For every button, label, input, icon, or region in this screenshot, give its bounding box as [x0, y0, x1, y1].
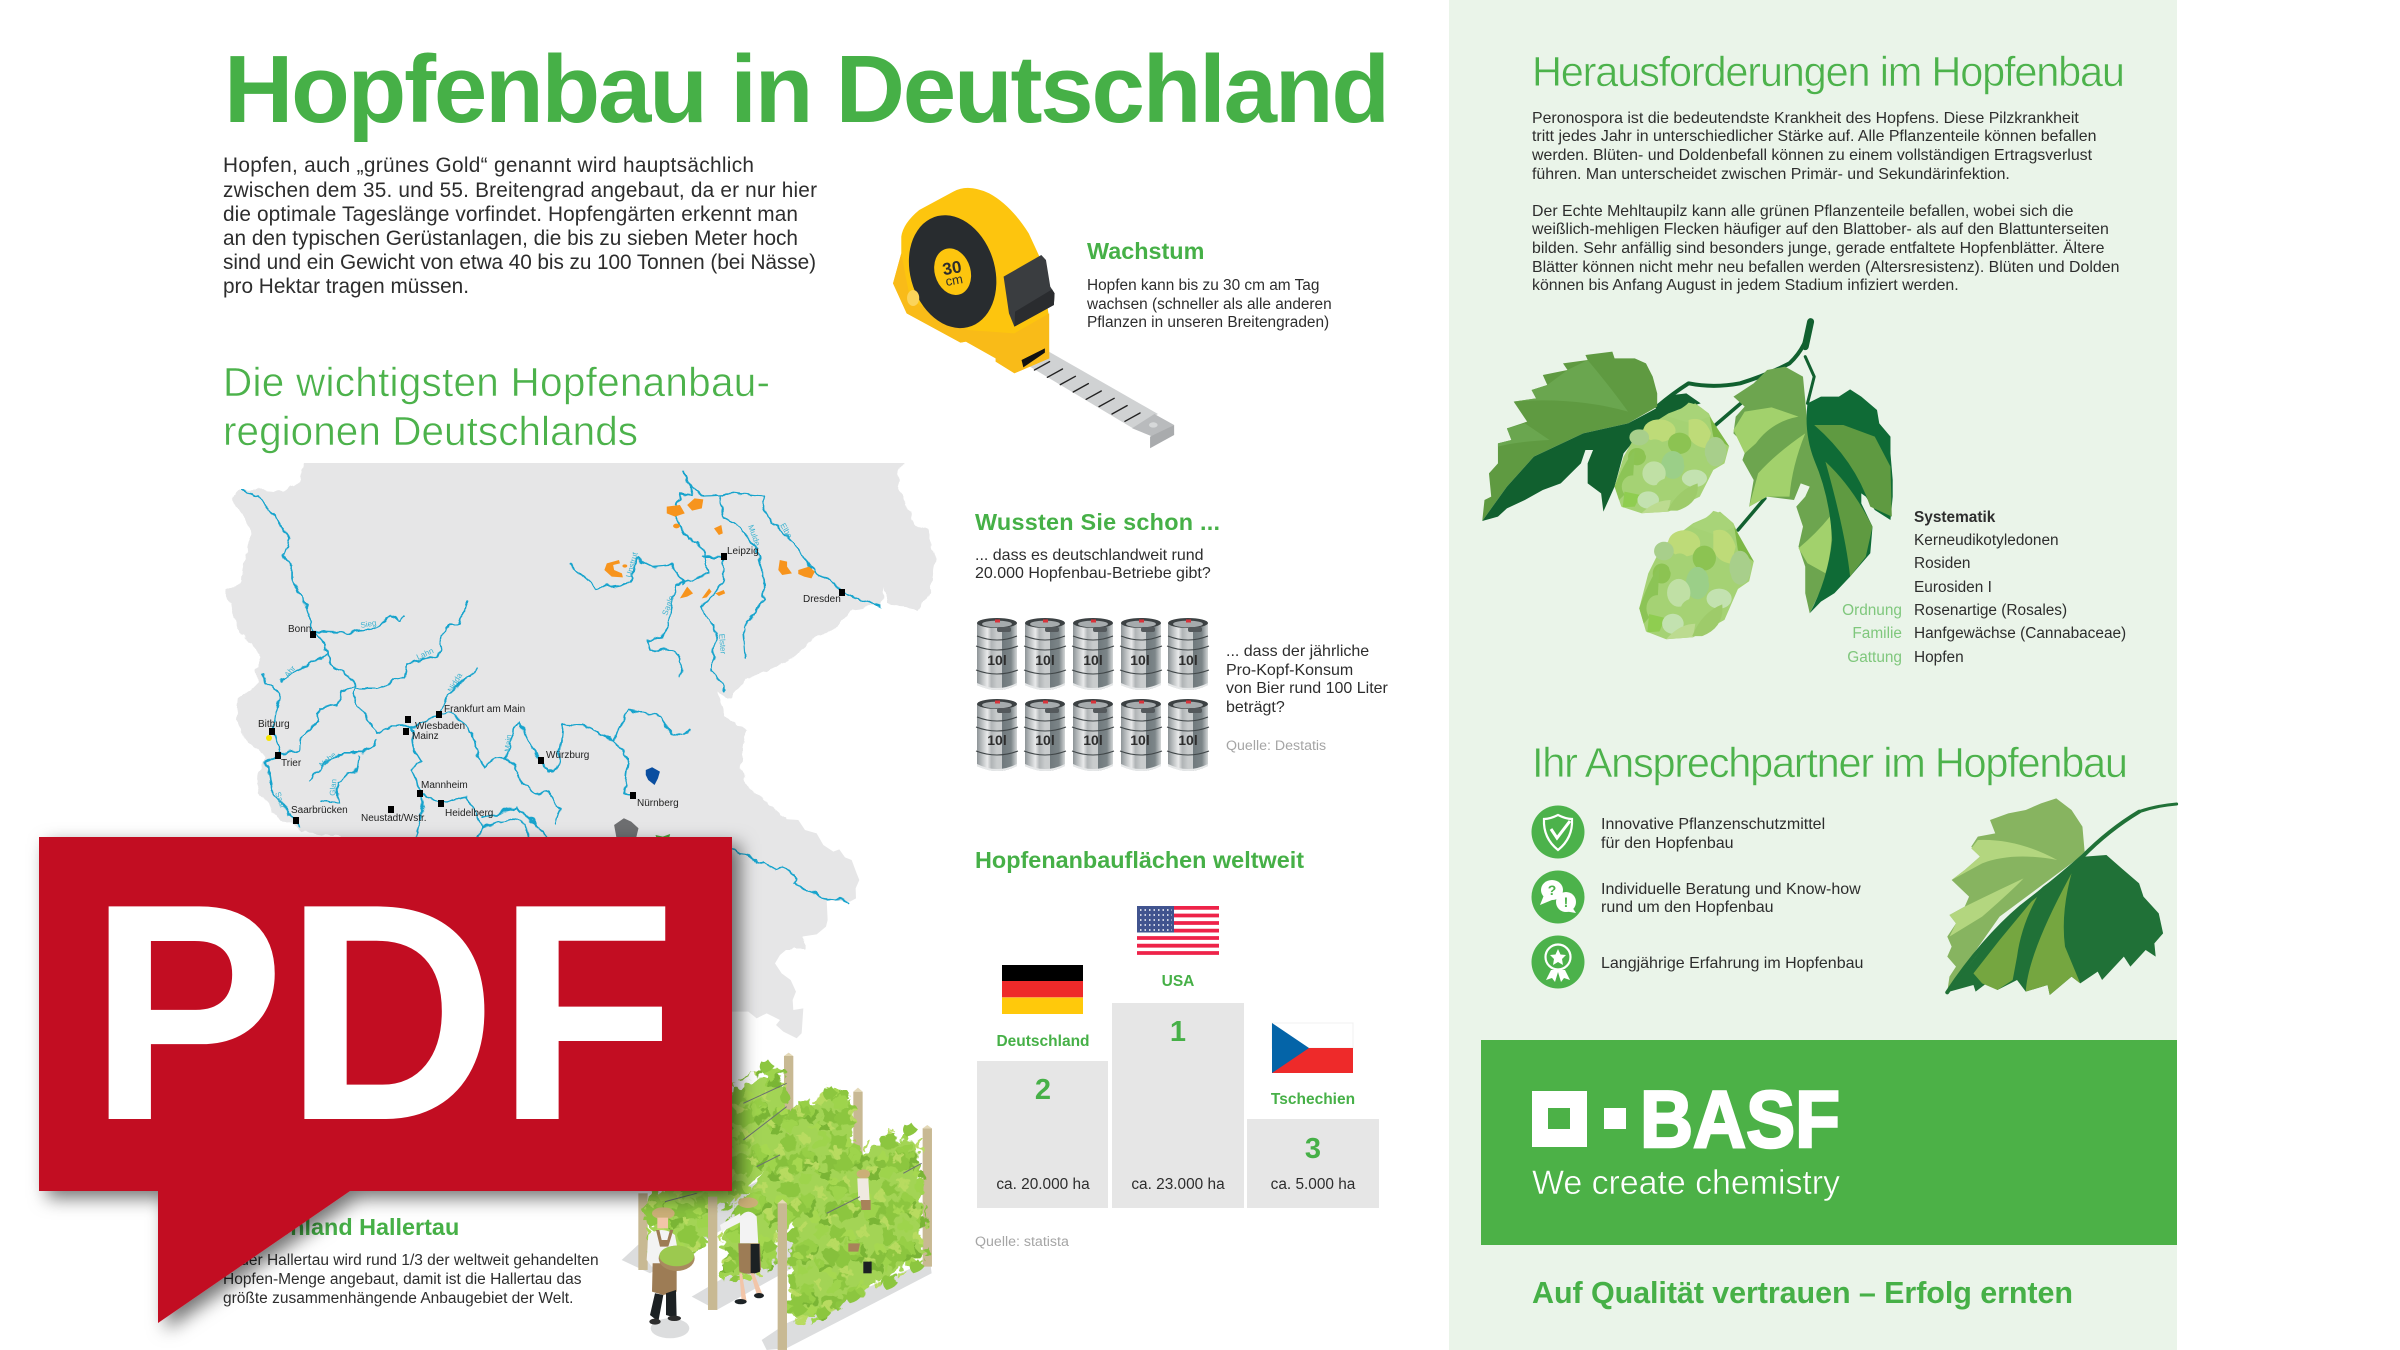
icon grid: beer kegs: 10l [987, 732, 1007, 748]
icon grid: beer kegs: 10l [1035, 732, 1055, 748]
worker middle [720, 1197, 764, 1304]
heading: Herausforderungen: Herausforderungen im Hopfenbau [1532, 48, 2125, 95]
table: Systematik: Hanfgewächse (Cannabaceae) [1914, 625, 2126, 642]
callout: PDF badge [39, 837, 732, 1323]
text block: Peronospora and Mehltau: tritt jedes Jahr in unterschiedlicher Stärke auf. Alle Pflanzenteile können befallen [1532, 128, 2096, 145]
podium bar USA [1112, 1003, 1244, 1208]
podium bar Deutschland [977, 1061, 1108, 1208]
table: Systematik: Eurosiden I [1914, 579, 1992, 596]
table: Systematik: Hopfen [1914, 649, 1964, 666]
text block: Peronospora and Mehltau [1531, 110, 2119, 294]
panel: right light green background [1449, 0, 2177, 1350]
illustration: hop leaf [1947, 798, 2177, 995]
flag: USA [1137, 906, 1219, 955]
wire strokes [665, 1083, 922, 1213]
table: Systematik: Systematik [1914, 509, 1996, 526]
map river labels: Sieg [360, 618, 377, 630]
text block: Hopfenland Hallertau: größte zusammenhängende Anbaugebiet der Welt. [223, 1290, 573, 1307]
text block: Wachstum: Hopfen kann bis zu 30 cm am Tag [1087, 277, 1319, 294]
text block: Hopfenland Hallertau: Hopfen-Menge angebaut, damit ist die Hallertau das [223, 1271, 582, 1288]
country labels: Tschechien [1271, 1091, 1355, 1108]
map city labels: Saarbrücken [291, 805, 348, 816]
text block: introduction: sind und ein Gewicht von etwa 40 bis zu 100 Tonnen (bei Nässe) [223, 251, 816, 274]
podium bar Tschechien: 3 [1305, 1133, 1321, 1165]
icon grid: beer kegs [976, 618, 1209, 771]
left leaf [1482, 352, 1701, 521]
icon grid: beer kegs: 10l [1083, 732, 1103, 748]
map land shape [224, 453, 936, 950]
accent leaves [646, 1059, 925, 1320]
icon: question and exclamation bubbles: ? [1548, 882, 1556, 898]
middle post [708, 1197, 717, 1310]
text block: introduction [223, 154, 817, 298]
heading: Anbauregionen [223, 359, 770, 454]
source: Quelle: statista [975, 1234, 1069, 1250]
text block: introduction: die optimale Tageslänge vorfindet. Hopfengärten erkennt man [223, 203, 798, 226]
map river labels: Nidda [446, 671, 464, 694]
map city labels: Nürnberg [637, 798, 679, 809]
map river labels: Main [503, 734, 514, 752]
BASF logo squares [1532, 1091, 1587, 1147]
icon grid: beer kegs: 10l [1130, 652, 1150, 668]
front post [778, 1203, 787, 1350]
map rivers [243, 472, 880, 902]
text block: introduction: zwischen dem 35. und 55. Breitengrad angebaut, da er nur hier [223, 179, 817, 202]
icon grid: beer kegs: 10l [1035, 652, 1055, 668]
heading: Anbauregionen: Die wichtigsten Hopfenanbau- [223, 359, 770, 405]
podium bar Tschechien [1247, 1119, 1379, 1208]
table: Systematik: Rosiden [1914, 555, 1970, 572]
right leaf [1733, 367, 1893, 613]
heading: Ansprechpartner: Ihr Ansprechpartner im Hopfenbau [1532, 739, 2128, 786]
map river labels: Ahr [283, 664, 298, 679]
illustration: hop garden with workers [622, 1053, 932, 1350]
text block: Peronospora and Mehltau: Der Echte Mehltaupilz kann alle grünen Pflanzenteile befallen, wobei sich die [1532, 203, 2074, 220]
hedge back row [643, 1068, 793, 1260]
hedge front row [787, 1130, 928, 1327]
country labels: Deutschland [996, 1033, 1090, 1050]
flag: Germany [1002, 965, 1083, 1014]
map city labels: Neustadt/Wstr. [361, 813, 427, 824]
map city labels [258, 546, 841, 824]
text block: Peronospora and Mehltau: werden. Blüten- und Doldenbefall können zu einem vollständigen Ertragsverlust [1531, 147, 2093, 164]
map city labels: Wiesbaden [415, 721, 465, 732]
text block: introduction: pro Hektar tragen müssen. [223, 275, 469, 298]
map land lower part [700, 813, 859, 1038]
icon: shield with check [1532, 806, 1584, 858]
back posts [638, 1056, 932, 1270]
text block: Peronospora and Mehltau: können bis Anfang August in jedem Stadium infiziert werden. [1532, 277, 1959, 294]
map river labels [273, 522, 794, 810]
text block: Pro-Kopf-Konsum: von Bier rund 100 Liter [1226, 680, 1389, 697]
map city labels: Bitburg [258, 719, 290, 730]
text block: Pro-Kopf-Konsum: beträgt? [1226, 699, 1285, 716]
worker left with basket [647, 1207, 695, 1325]
map river labels: Glan [328, 779, 338, 796]
text block: Wussten Sie schon: 20.000 Hopfenbau-Betriebe gibt? [975, 565, 1211, 582]
text block: Wachstum [1086, 238, 1332, 331]
text block: Wussten Sie schon: ... dass es deutschlandweit rund [975, 547, 1204, 564]
text: Erfahrung: Langjährige Erfahrung im Hopfenbau [1601, 955, 1863, 972]
map city labels: Trier [281, 758, 302, 769]
icon: award rosette [1532, 936, 1584, 988]
icon grid: beer kegs: 10l [1178, 652, 1198, 668]
map hop regions [604, 498, 815, 840]
text block: Hopfenland Hallertau: In der Hallertau wird rund 1/3 der weltweit gehandelten [223, 1252, 599, 1269]
tape label 30 cm: 30 [941, 257, 963, 279]
title: Hopfenbau in Deutschland [224, 36, 1390, 143]
table: Systematik: Kerneudikotyledonen [1914, 532, 2059, 549]
country labels: USA [1162, 973, 1194, 990]
map city labels: Bonn [288, 624, 311, 635]
icon: tape measure [893, 188, 1174, 448]
map city labels: Frankfurt am Main [444, 704, 525, 715]
table: Systematik: Ordnung [1842, 602, 1902, 619]
heading: Anbauregionen: regionen Deutschlands [223, 408, 638, 454]
text: Pflanzenschutzmittel: für den Hopfenbau [1601, 835, 1734, 852]
flag: Czech Republic [1272, 1023, 1353, 1073]
table: Systematik: Rosenartige (Rosales) [1914, 602, 2067, 619]
podium bar USA: 1 [1170, 1016, 1186, 1048]
illustration: hop branch with leaves and cones [1482, 322, 1893, 639]
map river labels: Lahn [415, 646, 435, 662]
BASF wordmark: BASF [1640, 1075, 1840, 1165]
text block: introduction: Hopfen, auch „grünes Gold“ genannt wird hauptsächlich [223, 154, 754, 177]
map: Germany hop growing regions [224, 453, 936, 1038]
icon grid: beer kegs: 10l [1083, 652, 1103, 668]
map city labels: Mainz [412, 731, 439, 742]
podium bar Tschechien: ca. 5.000 ha [1271, 1176, 1356, 1193]
text block: Hopfenland Hallertau [223, 1214, 599, 1307]
table: Systematik: Gattung [1847, 649, 1902, 666]
text: Beratung: Individuelle Beratung und Know-how [1601, 881, 1861, 898]
podium bar Deutschland: ca. 20.000 ha [996, 1176, 1090, 1193]
slogan: Auf Qualität vertrauen – Erfolg ernten [1532, 1276, 2073, 1310]
map river labels: Elster [717, 633, 728, 655]
text block: Wussten Sie schon [975, 509, 1220, 582]
tape label 30 cm: cm [944, 271, 964, 289]
map city markers [266, 553, 845, 824]
icon: question and exclamation bubbles: ! [1564, 894, 1568, 910]
map city labels: Mannheim [421, 780, 468, 791]
table: Systematik [1842, 509, 2126, 666]
map river labels: Saar [273, 791, 287, 810]
ground shadows [622, 1180, 932, 1350]
map city labels: Leipzig [727, 546, 759, 557]
BASF logo dot [1604, 1108, 1626, 1129]
text block: Hopfenland Hallertau: Hopfenland Hallertau [224, 1214, 459, 1240]
text block: Pro-Kopf-Konsum: Pro-Kopf-Konsum [1226, 662, 1353, 679]
map city labels: Würzburg [546, 750, 589, 761]
country labels [996, 973, 1355, 1108]
callout: PDF badge: PDF [89, 840, 676, 1185]
text: Pflanzenschutzmittel [1601, 816, 1825, 852]
stems [1657, 322, 1811, 407]
text block: Peronospora and Mehltau: Blätter können nicht mehr neu befallen werden (Altersresistenz). Blüten und Dolden [1532, 259, 2119, 276]
worker right behind hedge [848, 1169, 872, 1273]
text block: Peronospora and Mehltau: Peronospora ist die bedeutendste Krankheit des Hopfens. Diese Pilzkrankheit [1532, 110, 2079, 127]
text: Beratung: rund um den Hopfenbau [1601, 899, 1774, 916]
map river labels: Unstrut [624, 551, 640, 579]
text block: Wachstum: Pflanzen in unseren Breitengraden) [1087, 314, 1329, 331]
text: Beratung [1601, 881, 1861, 916]
map river labels: Elbe [778, 522, 794, 540]
icon: question and exclamation bubbles [1532, 870, 1584, 924]
hop cones [1615, 403, 1754, 639]
text block: Pro-Kopf-Konsum: Quelle: Destatis [1226, 738, 1326, 754]
text block: Pro-Kopf-Konsum [1226, 643, 1389, 754]
icon grid: beer kegs: 10l [987, 652, 1007, 668]
map city labels: Dresden [803, 594, 841, 605]
text block: Pro-Kopf-Konsum: ... dass der jährliche [1226, 643, 1369, 660]
hedge middle row [718, 1087, 862, 1285]
chart: podium of hop acreage [975, 906, 1379, 1250]
table: Systematik: Familie [1852, 625, 1902, 642]
text block: Peronospora and Mehltau: weißlich-mehligen Flecken häufiger auf den Blattober- als auf den Blattunterseiten [1531, 221, 2109, 238]
text block: Wussten Sie schon: Wussten Sie schon ... [975, 509, 1220, 535]
podium bar Deutschland: 2 [1035, 1074, 1051, 1106]
heading: Hopfenanbauflächen weltweit: Hopfenanbauflächen weltweit [975, 847, 1304, 873]
text block: Wachstum: Wachstum [1087, 238, 1204, 264]
map river labels: Saale [660, 594, 676, 617]
tape label 30 cm [941, 257, 965, 289]
text block: Peronospora and Mehltau: führen. Man unterscheidet zwischen Primär- und Sekundärinfektion. [1532, 166, 2010, 183]
text block: Wachstum: wachsen (schneller als alle anderen [1086, 296, 1332, 313]
text block: Peronospora and Mehltau: bilden. Sehr anfällig sind besonders junge, gerade entfaltete Hopfenblätter. Ältere [1532, 239, 2105, 257]
BASF claim: We create chemistry [1532, 1164, 1840, 1202]
icon grid: beer kegs: 10l [1130, 732, 1150, 748]
podium bar USA: ca. 23.000 ha [1131, 1176, 1225, 1193]
text block: introduction: an den typischen Gerüstanlagen, die bis zu sieben Meter hoch [223, 227, 798, 250]
map river labels: Mulde [746, 524, 762, 548]
icon grid: beer kegs: 10l [1178, 732, 1198, 748]
text: Pflanzenschutzmittel: Innovative Pflanzenschutzmittel [1601, 816, 1825, 833]
panel: BASF band [1481, 1040, 2177, 1245]
map city labels: Heidelberg [445, 808, 493, 819]
map river labels: Nahe [318, 750, 338, 770]
